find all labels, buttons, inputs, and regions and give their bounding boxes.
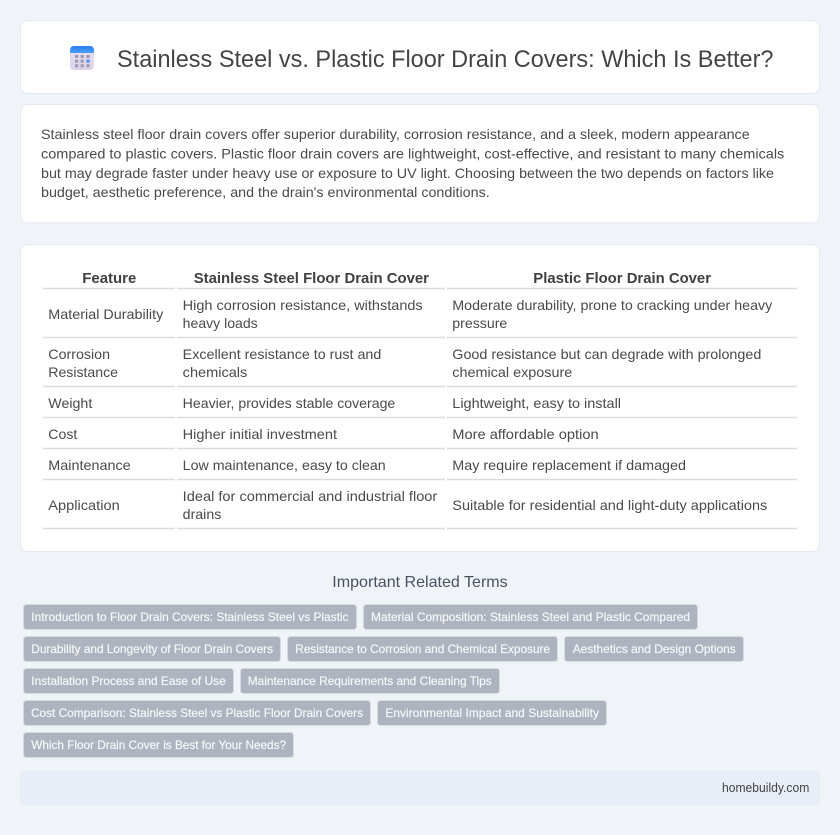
tag: maintenance: Maintenance Requirements and Cleaning Tips bbox=[248, 674, 492, 688]
tag: cost comparison bbox=[24, 700, 370, 726]
tag: environmental impact: Environmental Impact and Sustainability bbox=[385, 706, 599, 720]
related terms tags bbox=[24, 604, 744, 758]
row: material durability: pressure bbox=[452, 315, 508, 331]
row: cost: More affordable option bbox=[452, 426, 599, 442]
row: application: Ideal for commercial and industrial floor bbox=[183, 488, 438, 504]
row: cost: Higher initial investment bbox=[183, 426, 337, 442]
row: corrosion resistance: Corrosion bbox=[48, 346, 110, 362]
row: corrosion resistance: Excellent resistance to rust and bbox=[183, 346, 381, 362]
tag: introduction: Introduction to Floor Drain Covers: Stainless Steel vs Plastic bbox=[31, 610, 349, 624]
tag: resistance: Resistance to Corrosion and Chemical Exposure bbox=[295, 642, 550, 656]
row: material durability: heavy loads bbox=[183, 315, 258, 331]
intro paragraph: Stainless steel floor drain covers offer superior durability, corrosion resistance, and a sleek, modern appearance bbox=[41, 126, 750, 142]
tag: aesthetics bbox=[564, 636, 744, 662]
icon: calendar bbox=[70, 46, 94, 70]
row: application: Suitable for residential and light-duty applications bbox=[452, 497, 767, 513]
row: maintenance bbox=[48, 457, 686, 473]
intro paragraph: but may degrade faster under heavy use or exposure to UV light. Choosing between the two depends on factors like bbox=[41, 165, 774, 181]
tag: installation bbox=[24, 668, 234, 694]
intro paragraph: compared to plastic covers. Plastic floor drain covers are lightweight, cost-effective, and resistant to many chemicals bbox=[41, 146, 784, 162]
table header row: Plastic Floor Drain Cover bbox=[533, 270, 711, 287]
row: material durability bbox=[48, 297, 772, 331]
tag: environmental impact bbox=[378, 700, 606, 726]
tag: durability bbox=[24, 636, 280, 662]
row: material durability: Moderate durability, prone to cracking under heavy bbox=[452, 297, 772, 313]
intro paragraph bbox=[41, 126, 784, 200]
row: cost: Cost bbox=[48, 426, 77, 442]
panel: title bbox=[20, 20, 820, 94]
tag: which is best bbox=[24, 732, 294, 758]
tag: which is best: Which Floor Drain Cover is Best for Your Needs? bbox=[31, 738, 286, 752]
row: weight: Weight bbox=[48, 395, 92, 411]
intro paragraph: budget, aesthetic preference, and the drain's environmental conditions. bbox=[41, 184, 490, 200]
row: cost bbox=[48, 426, 599, 442]
row: material durability: High corrosion resistance, withstands bbox=[183, 297, 423, 313]
tag: material composition bbox=[364, 604, 698, 630]
row: material durability: Material Durability bbox=[48, 306, 163, 322]
row: maintenance: Maintenance bbox=[48, 457, 131, 473]
row: weight bbox=[48, 395, 621, 411]
tag: installation: Installation Process and Ease of Use bbox=[31, 674, 226, 688]
tag: durability: Durability and Longevity of Floor Drain Covers bbox=[31, 642, 273, 656]
row: corrosion resistance: chemical exposure bbox=[452, 364, 573, 380]
table header row: Feature bbox=[82, 270, 136, 287]
row: corrosion resistance: Resistance bbox=[48, 364, 118, 380]
row: application bbox=[48, 488, 767, 522]
tag: introduction bbox=[24, 604, 356, 630]
title: Stainless Steel vs. Plastic Floor Drain Covers: Which Is Better? bbox=[117, 46, 774, 73]
row: weight: Lightweight, easy to install bbox=[452, 395, 621, 411]
tag: material composition: Material Composition: Stainless Steel and Plastic Compared bbox=[371, 610, 690, 624]
row: application: Application bbox=[48, 497, 120, 513]
row: application: drains bbox=[183, 506, 221, 522]
tag: resistance bbox=[288, 636, 558, 662]
row: weight: Heavier, provides stable coverage bbox=[183, 395, 396, 411]
footer bbox=[20, 771, 820, 805]
row: corrosion resistance: Good resistance but can degrade with prolonged bbox=[452, 346, 761, 362]
footer source: homebuildy.com bbox=[722, 781, 809, 795]
panel: comparison table bbox=[20, 244, 820, 552]
row: maintenance: May require replacement if damaged bbox=[452, 457, 686, 473]
tag: aesthetics: Aesthetics and Design Options bbox=[573, 642, 736, 656]
row: maintenance: Low maintenance, easy to clean bbox=[183, 457, 386, 473]
heading: important related terms: Important Related Terms bbox=[332, 574, 508, 591]
tag: maintenance bbox=[240, 668, 500, 694]
row: corrosion resistance bbox=[48, 346, 761, 380]
table header row: Stainless Steel Floor Drain Cover bbox=[194, 270, 429, 287]
table header row bbox=[82, 270, 711, 287]
panel: introduction bbox=[20, 104, 820, 223]
tag: cost comparison: Cost Comparison: Stainless Steel vs Plastic Floor Drain Covers bbox=[31, 706, 363, 720]
row: corrosion resistance: chemicals bbox=[183, 364, 247, 380]
